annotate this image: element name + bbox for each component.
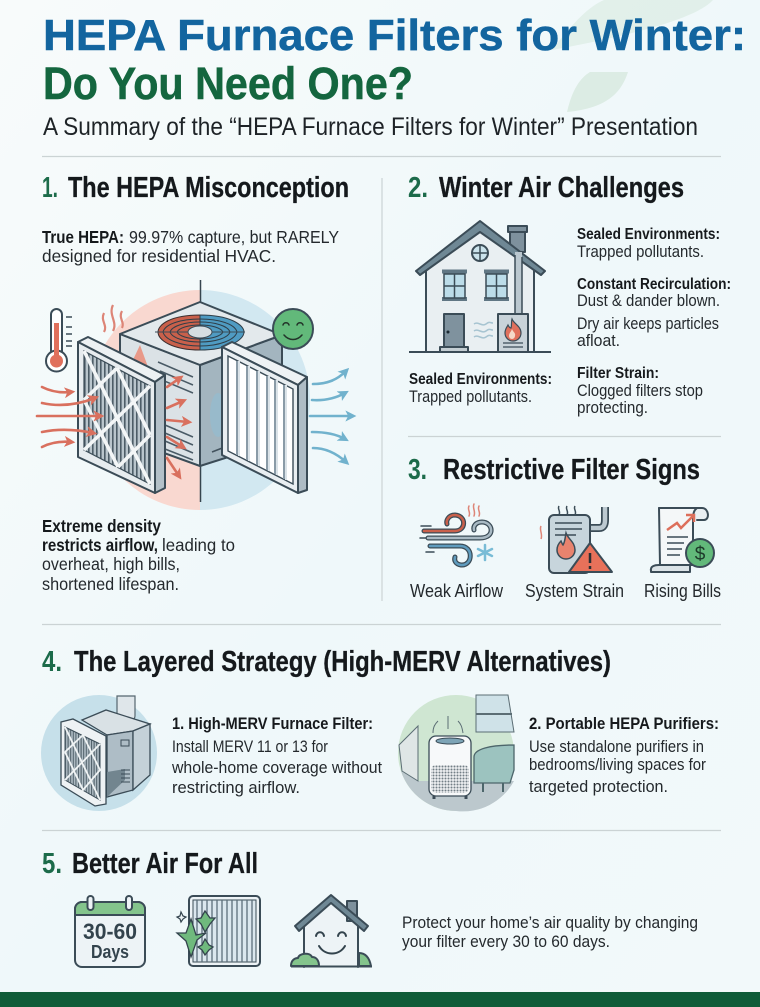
icon: rising bills [651,508,714,572]
heading 1: 1. [42,172,58,204]
heading 5: Better Air For All [72,848,258,880]
icon: calendar: 30-60 [83,919,137,944]
text: closing message: Protect your home’s air quality by changing [402,914,698,932]
text: extreme density [42,516,235,594]
icon: happy house [291,895,372,967]
panel: section 5 better air for all [42,848,698,967]
text: closing message: your filter every 30 to 60 days. [402,933,610,951]
text: sealed environments below house [409,371,552,406]
heading 4: 4. [42,646,62,678]
illustration: furnace with filters [37,280,352,510]
icon: weak airflow [420,504,492,565]
panel: section 4 layered strategy [41,646,719,811]
text: portable purifiers [529,715,719,796]
heading 3: Restrictive Filter Signs [443,454,700,486]
labels: Weak Airflow [410,580,504,601]
text: sealed environments below house: Trapped pollutants. [409,388,532,406]
text: high-MERV filter: whole-home coverage without [171,759,382,777]
panel: section 2 winter air challenges [408,172,731,417]
icon: smiley [273,309,313,349]
text: extreme density: leading to [162,535,235,555]
text: constant recirculation: Dust & dander blown. [577,292,720,310]
text: filter strain: Filter Strain: [577,365,659,382]
text: closing message [402,914,698,951]
labels: Rising Bills [644,580,721,601]
text: portable purifiers: 2. Portable HEPA Purifiers: [529,715,719,733]
arrows: clean air out [310,371,352,462]
subtitle: A Summary of the “HEPA Furnace Filters for Winter” Presentation [43,113,698,141]
text: extreme density: restricts airflow, [42,535,158,555]
heading 2: 2. [408,172,428,204]
text: true HEPA: 99.97% capture, but RARELY [129,227,339,247]
icon: heat waves [103,305,123,332]
heading 5: 5. [42,848,62,880]
title: HEPA Furnace Filters for Winter: [43,11,746,60]
illustration: furnace filter circle [41,695,157,811]
arrows: hot air in [37,378,188,476]
heading 1: The HEPA Misconception [68,172,349,204]
heading 4: The Layered Strategy (High-MERV Alternatives) [74,646,611,678]
labels [410,580,721,601]
text: extreme density: overheat, high bills, [42,554,180,574]
heading 2: Winter Air Challenges [439,172,684,204]
title: Do You Need One? [43,58,413,109]
text: extreme density: shortened lifespan. [42,574,179,594]
text: true HEPA: designed for residential HVAC. [42,246,276,266]
text: constant recirculation: Dry air keeps particles [577,315,719,333]
text: high-MERV filter: 1. High-MERV Furnace Filter: [172,715,373,733]
icon: calendar [75,896,145,967]
text: extreme density: Extreme density [42,516,161,536]
text: portable purifiers: Use standalone purifiers in [529,738,704,756]
icon: clean filter with sparkles [177,896,260,966]
text: high-MERV filter: restricting airflow. [172,779,300,797]
text: sealed environments: Sealed Environments: [577,226,720,243]
text: filter strain: Clogged filters stop [577,382,703,400]
icon: calendar: Days [91,942,129,962]
left filter: dense pleats [78,337,165,493]
text: sealed environments below house: Sealed Environments: [409,371,552,388]
heading 3: 3. [408,454,427,486]
title [43,11,746,109]
icon: system strain [540,506,612,573]
text: sealed environments [577,226,720,261]
text: true HEPA: True HEPA: [42,227,124,247]
furnace unit [120,302,282,466]
decorative leaves [552,0,713,112]
text: portable purifiers: targeted protection. [529,778,668,796]
panel: section 1 the HEPA misconception [37,172,352,594]
text: true HEPA [42,227,339,266]
text: high-MERV filter: Install MERV 11 or 13 for [172,738,328,756]
icon: rising bills: $ [695,544,706,565]
text: filter strain: protecting. [577,399,648,417]
text: constant recirculation: afloat. [577,332,620,350]
text: sealed environments: Trapped pollutants. [577,243,704,261]
footer bar [0,992,760,1007]
text: constant recirculation [577,276,731,350]
text: constant recirculation: Constant Recirculation: [577,276,731,293]
text: filter strain [577,365,703,417]
right filter: clean pleats [222,342,307,493]
text: portable purifiers: bedrooms/living spaces for [529,756,706,774]
icon: house with furnace [409,221,551,352]
illustration: portable purifier circle [398,695,514,811]
icon: thermometer [46,309,72,372]
text: high-MERV filter [171,715,382,797]
panel: section 3 restrictive filter signs [408,454,721,601]
labels: System Strain [525,580,624,601]
